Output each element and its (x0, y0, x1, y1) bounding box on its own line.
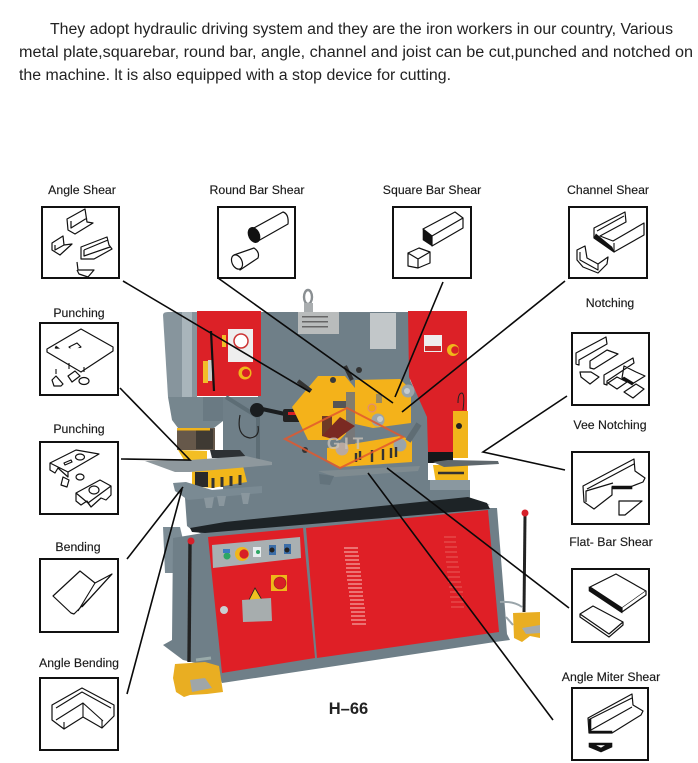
bracket feet (204, 493, 250, 508)
Square Bar Shear (383, 183, 481, 278)
Channel Shear (567, 183, 649, 278)
control panel (212, 537, 301, 568)
Channel Shear: Channel Shear (567, 183, 649, 197)
model label: H–66 (329, 700, 368, 718)
Flat Bar Shear: Flat- Bar Shear (569, 535, 653, 549)
punching station (177, 428, 247, 488)
Angle Bending (39, 656, 119, 750)
machine photo (145, 290, 540, 697)
Square Bar Shear: Square Bar Shear (383, 183, 481, 197)
warning triangle (249, 588, 262, 600)
Round Bar Shear: Round Bar Shear (209, 183, 305, 197)
Bending: Bending (55, 540, 101, 554)
red door right (306, 510, 499, 658)
intro text: the machine. lt is also equipped with a stop device for cutting. (19, 67, 451, 84)
intro text (19, 21, 693, 84)
Angle Bending: Angle Bending (39, 656, 119, 670)
right station (430, 460, 499, 490)
Vee Notching: Vee Notching (573, 418, 647, 432)
intro text: They adopt hydraulic driving system and they are the iron workers in our country, Various (50, 21, 673, 38)
intro text: metal plate,squarebar, round bar, angle, channel and joist can be cut,punched and notched on (19, 44, 693, 61)
logo watermark (285, 408, 403, 468)
lifting eye (304, 290, 313, 312)
Round Bar Shear (209, 183, 305, 278)
machine body (185, 312, 490, 535)
Notching (572, 296, 649, 405)
Punching lower (40, 422, 118, 514)
right foot pedal (500, 510, 540, 642)
yellow upper blade plate (292, 376, 411, 440)
side box (163, 527, 188, 573)
vent louvers left (344, 548, 366, 624)
Notching: Notching (586, 296, 634, 310)
right red panel (408, 311, 468, 463)
logo watermark: GIT (327, 434, 367, 453)
Angle Miter Shear: Angle Miter Shear (562, 670, 660, 684)
Angle Shear: Angle Shear (48, 183, 116, 197)
blade details (298, 366, 419, 462)
Bending (40, 540, 118, 632)
door knob (220, 606, 228, 614)
Punching upper (40, 306, 118, 395)
black seal band (190, 497, 490, 533)
left red panel (197, 311, 261, 396)
leader lines (120, 278, 569, 720)
left work table (145, 456, 272, 472)
Punching lower: Punching (53, 422, 105, 436)
data plate (242, 598, 272, 622)
Punching upper: Punching (53, 306, 105, 320)
Vee Notching (572, 418, 649, 524)
gauge rod (211, 331, 214, 391)
left foot pedal (173, 538, 223, 697)
vent louvers right (444, 537, 464, 607)
Angle Shear (42, 183, 119, 278)
hydraulic handle (226, 397, 307, 460)
yellow lower blade plate (327, 436, 412, 467)
lower frame (163, 508, 510, 683)
center table (318, 466, 420, 485)
Angle Miter Shear (562, 670, 660, 760)
left table base (173, 482, 262, 500)
nameplates (298, 312, 396, 349)
main switch (271, 575, 287, 591)
red door left (208, 528, 315, 673)
left cylinder column (163, 312, 223, 428)
Flat Bar Shear (569, 535, 653, 642)
